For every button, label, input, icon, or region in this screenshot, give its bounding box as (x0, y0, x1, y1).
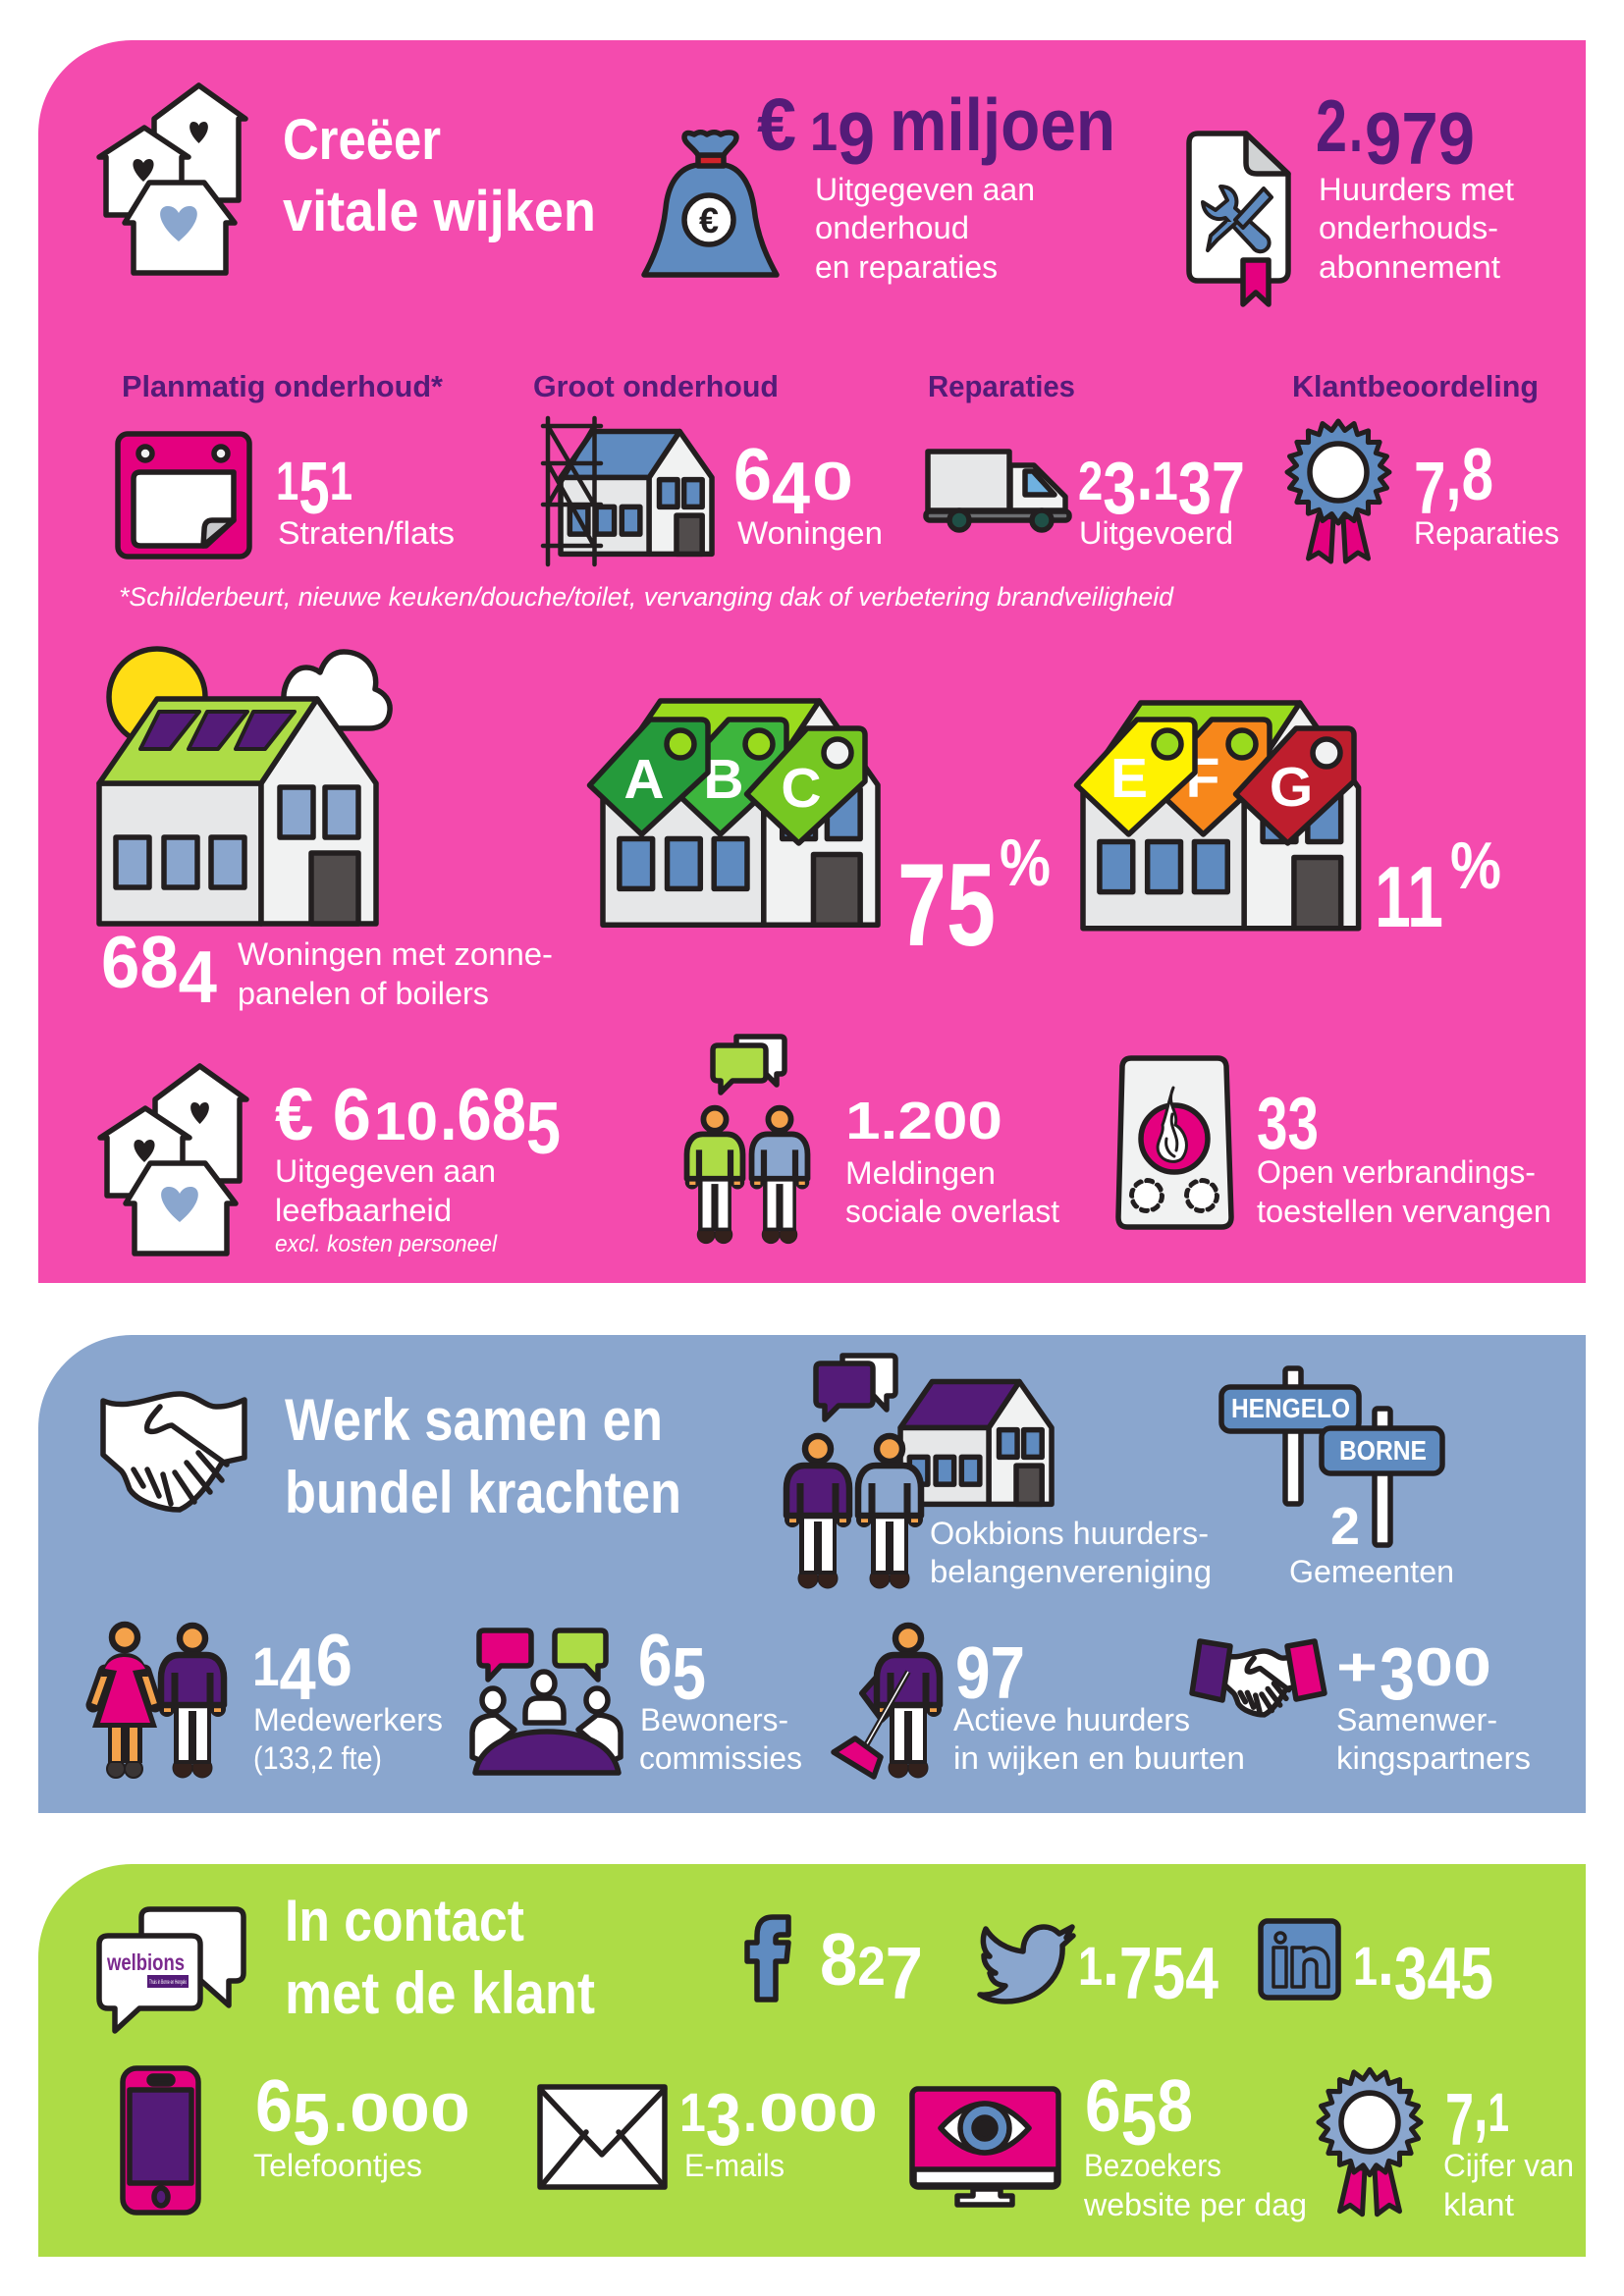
stat: +300 samenwerkingspartners: Samenwer- (1336, 1702, 1497, 1737)
icon: sweeping tenant (834, 1626, 942, 1778)
stat: 658 bezoekers: 8 (1157, 2064, 1193, 2147)
stat: € 610.685: leefbaarheid (275, 1193, 452, 1228)
label: Ookbions huurdersbelangenvereniging: Ookbions huurders- (930, 1516, 1209, 1551)
stat: 684 woningen met zonnepanelen: 68 (101, 921, 183, 1003)
stat: 23.137 uitgevoerd: 2 (1078, 451, 1103, 511)
icon: speech bubbles with Welbions logo: welbions (106, 1949, 185, 1975)
stat: 97 actieve huurders: 97 (955, 1631, 1025, 1714)
stat: 2.979 huurders: 979 (1365, 97, 1475, 180)
stat: 33 verbrandingstoestellen: 33 (1257, 1082, 1319, 1164)
stat: 7,1 cijfer van klant: Cijfer van (1443, 2148, 1574, 2183)
icon: rosette blue (1287, 421, 1389, 561)
icon: calendar (118, 434, 249, 557)
stat: 684 woningen met zonnepanelen: panelen of boilers (238, 976, 489, 1011)
stat: 827 facebook: 82 (820, 1918, 888, 2001)
stat: 7,1 cijfer van klant (1443, 2064, 1574, 2222)
icon: envelope (540, 2087, 665, 2187)
stat: 2.979 huurders: 2 (1316, 84, 1347, 167)
stat: 146 medewerkers (252, 1619, 443, 1776)
label: Ookbions huurdersbelangenvereniging: belangenvereniging (930, 1554, 1212, 1589)
stat: 65 bewonerscommissies: 5 (672, 1632, 706, 1715)
stat: +300 samenwerkingspartners: 00 (1415, 1636, 1491, 1697)
icon: two neighbours talking (685, 1037, 809, 1244)
stat: 2.979 huurders: abonnement (1319, 249, 1500, 285)
heading: Reparaties: Reparaties (928, 369, 1075, 403)
stat: +300 samenwerkingspartners: kingspartners (1336, 1740, 1531, 1776)
icon: house with labels E F G: E (1110, 747, 1148, 810)
stat: 2.979 huurders: Huurders met (1319, 172, 1514, 207)
icon: handshake (103, 1394, 244, 1510)
stat: 151 straten/flats: 1 (330, 451, 352, 511)
stat: 65.000 telefoontjes: . (334, 2082, 348, 2143)
heading: In contact met de klant (285, 1888, 595, 2026)
stat: 151 straten/flats: 1 (276, 451, 298, 511)
icon: speech bubbles with Welbions logo (99, 1909, 244, 2031)
stat: 7,8 reparaties (1414, 433, 1559, 551)
stat: 1.754 twitter: 1. (1078, 1918, 1123, 2001)
stat: 2.979 huurders: . (1349, 84, 1363, 167)
stat: 7,8 reparaties: 7 (1414, 447, 1445, 529)
panel: Werk samen en bundel krachten (38, 1335, 1586, 1813)
stat: 640 woningen: 0 (812, 451, 853, 511)
stat: 7,1 cijfer van klant: 7 (1445, 2078, 1474, 2161)
stat: € 19 miljoen: en reparaties (815, 249, 998, 285)
stat: 65 bewonerscommissies: 6 (638, 1619, 679, 1701)
stat: 23.137 uitgevoerd: . (1136, 433, 1153, 515)
icon: cloud (284, 652, 390, 728)
stat: 23.137 uitgevoerd (1078, 433, 1245, 551)
stat: 658 bezoekers: 6 (1085, 2064, 1126, 2147)
stat: 2 gemeenten: 2 (1330, 1497, 1360, 1556)
stat: 33 verbrandingstoestellen: toestellen vervangen (1257, 1194, 1551, 1229)
stat: 97 actieve huurders (953, 1631, 1245, 1776)
stat: 23.137 uitgevoerd: Uitgevoerd (1079, 515, 1233, 551)
stat: 75%: 75 (897, 839, 996, 971)
stat: 23.137 uitgevoerd: 3 (1103, 447, 1136, 529)
stat: € 19 miljoen: Uitgegeven aan (815, 172, 1035, 207)
icon: house with labels E F G: G (1270, 756, 1313, 819)
stat: 658 bezoekers: 5 (1121, 2078, 1157, 2161)
heading: Groot onderhoud: Groot onderhoud (533, 369, 779, 403)
stat: € 610.685: 5 (526, 1087, 561, 1169)
stat: 7,1 cijfer van klant: klant (1443, 2187, 1514, 2222)
heading: Creëer vitale wijken: Creëer (283, 108, 441, 172)
stat: 151 straten/flats (276, 447, 455, 551)
icon: money bag (644, 133, 777, 275)
stat: 13.000 e-mails (679, 2078, 878, 2183)
heading: In contact met de klant: In contact (285, 1888, 524, 1953)
stat: € 19 miljoen: miljoen (890, 83, 1115, 166)
stat: € 19 miljoen (757, 83, 1115, 285)
stat: 146 medewerkers: 4 (280, 1632, 316, 1715)
stat: 684 woningen met zonnepanelen: Woningen met zonne- (238, 936, 553, 972)
heading: Creëer vitale wijken: vitale wijken (283, 180, 596, 243)
panel: In contact met de klant (38, 1864, 1586, 2257)
stat: 827 facebook: 7 (886, 1932, 923, 2014)
stat: 640 woningen: Woningen (737, 515, 883, 551)
icon: money bag: € (699, 200, 719, 240)
stat: 7,1 cijfer van klant: 1 (1489, 2082, 1509, 2143)
stat: € 19 miljoen: 9 (838, 97, 875, 180)
stat: € 610.685: € 6 (275, 1073, 371, 1155)
stat: 146 medewerkers: (133,2 fte) (253, 1740, 382, 1776)
stat: € 19 miljoen: 1 (810, 101, 838, 162)
stat: 658 bezoekers: Bezoekers (1084, 2148, 1221, 2183)
stat: 11%: 11 (1375, 848, 1443, 945)
stat: 13.000 e-mails: . (743, 2082, 757, 2143)
stat: 65.000 telefoontjes: Telefoontjes (253, 2148, 422, 2183)
stat: 1.345 linkedin: 345 (1394, 1932, 1493, 2014)
stat: 33 verbrandingstoestellen (1257, 1082, 1551, 1229)
stat: +300 samenwerkingspartners (1336, 1632, 1531, 1776)
icon: linkedin (1261, 1921, 1338, 1998)
stat: 13.000 e-mails: 000 (759, 2082, 878, 2143)
stat: 97 actieve huurders: Actieve huurders (953, 1702, 1190, 1737)
stat: 146 medewerkers: 1 (252, 1636, 280, 1697)
stat: 65 bewonerscommissies (638, 1619, 802, 1776)
stat: 684 woningen met zonnepanelen (101, 921, 553, 1018)
icon: twitter bird (980, 1927, 1073, 2002)
icon: house with labels E F G (1076, 703, 1359, 929)
stat: 684 woningen met zonnepanelen: 4 (179, 935, 217, 1018)
stat: 151 straten/flats: Straten/flats (278, 515, 455, 551)
stat: 7,8 reparaties: ,8 (1445, 433, 1493, 515)
heading: In contact met de klant: met de klant (285, 1960, 595, 2026)
stat: 33 verbrandingstoestellen: Open verbrandings- (1257, 1154, 1536, 1190)
icon: sun (109, 649, 205, 745)
icon: mobile phone (123, 2068, 198, 2213)
stat: € 19 miljoen: onderhoud (815, 210, 969, 245)
stat: 23.137 uitgevoerd: 1 (1153, 451, 1178, 511)
stat: 640 woningen (733, 433, 883, 551)
icon: road signs Hengelo and Borne: HENGELO (1231, 1393, 1350, 1423)
stat: € 610.685: excl. kosten personeel (275, 1231, 498, 1257)
icon: house with labels A B C (589, 701, 878, 925)
stat: 13.000 e-mails: 1 (679, 2082, 706, 2143)
icon: facebook (747, 1917, 788, 2000)
stat: 1.200 meldingen (845, 1092, 1059, 1229)
stat: 23.137 uitgevoerd: 37 (1178, 447, 1245, 529)
stat: 65 bewonerscommissies: commissies (639, 1740, 802, 1776)
stat: € 610.685 (275, 1073, 561, 1257)
stat: 65.000 telefoontjes: 000 (350, 2082, 470, 2143)
icon: boiler (1118, 1058, 1231, 1227)
icon: delivery truck (926, 452, 1069, 530)
stat: 97 actieve huurders: in wijken en buurten (953, 1740, 1245, 1776)
footnote: *Schilderbeurt, nieuwe keuken/douche/toilet, vervanging dak of verbetering brandveiligheid (119, 582, 1174, 612)
heading: Werk samen en bundel krachten: bundel krachten (285, 1460, 681, 1525)
label: Ookbions huurdersbelangenvereniging (930, 1516, 1212, 1589)
stat: € 19 miljoen: € (757, 83, 796, 166)
stat: € 610.685: Uitgegeven aan (275, 1153, 496, 1189)
heading: Creëer vitale wijken (283, 108, 596, 243)
icon: house with labels E F G: F (1186, 747, 1219, 810)
stat: 658 bezoekers: website per dag (1083, 2187, 1307, 2222)
panel: Creëer vitale wijken (38, 40, 1586, 1283)
icon: monitor with eye (912, 2089, 1058, 2205)
stat: 65.000 telefoontjes (253, 2064, 470, 2183)
icon: house with labels A B C: A (623, 748, 665, 811)
stat: 13.000 e-mails: E-mails (684, 2148, 785, 2183)
stat: 65.000 telefoontjes: 6 (255, 2064, 297, 2147)
stat: 65 bewonerscommissies: Bewoners- (640, 1702, 788, 1737)
stat: 151 straten/flats: 5 (298, 447, 330, 529)
stat: 640 woningen: 4 (772, 447, 810, 529)
stat: € 610.685: .68 (440, 1073, 542, 1155)
icon: three houses (leefbaarheid) (100, 1066, 246, 1254)
heading: Klantbeoordeling: Klantbeoordeling (1292, 369, 1539, 403)
icon: road signs Hengelo and Borne: BORNE (1339, 1435, 1427, 1466)
icon: tenants association with house (785, 1356, 1052, 1588)
heading: Planmatig onderhoud: Planmatig onderhoud* (122, 369, 444, 403)
icon: document with tools (1189, 133, 1288, 304)
stat: 1.200 meldingen: 1.200 (845, 1092, 1002, 1150)
stat: 75%: % (1000, 826, 1051, 900)
stat: 11%: % (1450, 828, 1501, 903)
stat: 11% (1375, 828, 1501, 945)
stat: 2.979 huurders: onderhouds- (1319, 210, 1498, 245)
stat: 1.345 linkedin: 1. (1353, 1918, 1398, 2001)
icon: house with labels A B C: B (703, 748, 744, 811)
stat: € 610.685: 10 (374, 1091, 438, 1151)
heading: Werk samen en bundel krachten (285, 1387, 681, 1525)
icon: rosette light blue (1319, 2069, 1421, 2215)
stat: 65.000 telefoontjes: 5 (293, 2078, 330, 2161)
icon: road signs Hengelo and Borne (1221, 1368, 1442, 1545)
stat: 146 medewerkers: 6 (316, 1619, 352, 1701)
icon: meeting with speech bubbles (472, 1630, 621, 1773)
icon: three houses with hearts (99, 85, 245, 273)
icon: house with labels A B C: C (781, 757, 822, 820)
stat: 658 bezoekers (1083, 2064, 1307, 2222)
stat: 7,1 cijfer van klant: , (1474, 2064, 1489, 2147)
stat: 7,8 reparaties: Reparaties (1414, 515, 1559, 551)
stat: 640 woningen: 6 (733, 433, 775, 515)
stat: +300 samenwerkingspartners: + (1336, 1636, 1378, 1697)
stat: 13.000 e-mails: 3 (706, 2078, 741, 2161)
stat: 1.200 meldingen: sociale overlast (845, 1194, 1059, 1229)
stat: +300 samenwerkingspartners: 3 (1380, 1632, 1415, 1715)
icon: house with scaffolding (543, 418, 712, 564)
stat: 2 gemeenten: Gemeenten (1289, 1554, 1454, 1589)
icon: speech bubbles with Welbions logo: Thuis in Borne en Hengelo (149, 1980, 187, 1986)
stat: 1.754 twitter: 754 (1119, 1932, 1218, 2014)
icon: handshake with coloured cuffs (1192, 1641, 1325, 1715)
stat: 2 gemeenten (1289, 1497, 1454, 1589)
stat: 2.979 huurders (1316, 84, 1514, 285)
stat: 1.200 meldingen: Meldingen (845, 1155, 996, 1191)
icon: house with solar panels (99, 699, 376, 924)
heading: Werk samen en bundel krachten: Werk samen en (285, 1387, 663, 1453)
stat: 146 medewerkers: Medewerkers (253, 1702, 443, 1737)
icon: woman and man employees (92, 1625, 226, 1778)
